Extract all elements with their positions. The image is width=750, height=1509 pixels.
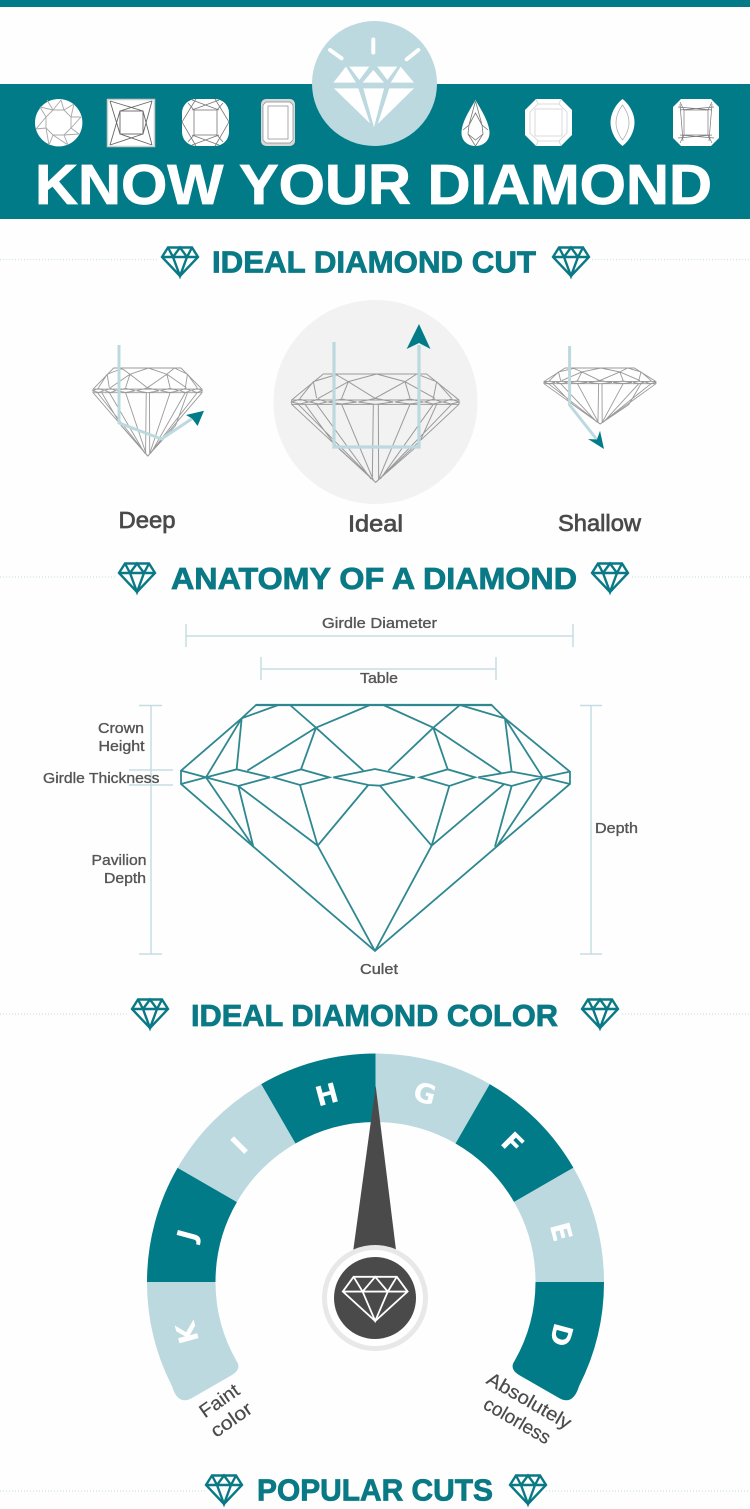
measure: left heights <box>43 706 173 954</box>
segment I: I <box>226 1132 255 1161</box>
segment J <box>147 1168 237 1282</box>
icon: marquise cut <box>610 99 634 146</box>
segment H <box>261 1054 376 1143</box>
heading: anatomy of a diamond: ANATOMY OF A DIAMOND <box>171 561 577 596</box>
measure: table: Table <box>360 670 398 687</box>
caption: absolutely colorless: colorless <box>479 1394 554 1449</box>
segment H: H <box>312 1078 342 1113</box>
panel: color gauge <box>147 1054 604 1449</box>
heading: ideal diamond color: IDEAL DIAMOND COLOR <box>191 998 558 1033</box>
label: culet: Culet <box>360 961 399 978</box>
measure: left heights: Girdle Thickness <box>43 770 160 787</box>
segment I <box>178 1084 296 1202</box>
caption: absolutely colorless <box>479 1369 575 1449</box>
measure: depth: Depth <box>595 820 638 837</box>
measure: left heights: Depth <box>104 870 146 887</box>
icon: round cut <box>35 99 82 146</box>
segment G: G <box>410 1077 439 1112</box>
segment D <box>513 1282 604 1400</box>
gauge hub <box>322 1245 428 1351</box>
segment E: E <box>543 1219 578 1245</box>
icon: asscher cut <box>525 99 572 146</box>
measure: depth <box>580 706 638 954</box>
segment K <box>147 1282 238 1400</box>
icon: cushion cut <box>182 99 229 146</box>
gauge needle <box>353 1086 396 1250</box>
icon: emerald cut <box>261 99 295 146</box>
heading: popular cuts: POPULAR CUTS <box>257 1473 493 1508</box>
segment F: F <box>494 1127 529 1162</box>
icon: princess cut <box>108 100 154 146</box>
icon: radiant cut <box>673 99 719 146</box>
diagram: deep cut <box>93 345 204 456</box>
segment G <box>376 1054 490 1143</box>
icon: pear cut <box>462 100 490 146</box>
diagram: shallow cut <box>544 346 656 449</box>
segment E <box>514 1168 604 1282</box>
heading: ideal diamond cut: IDEAL DIAMOND CUT <box>212 244 536 280</box>
measure: left heights: Height <box>98 738 145 755</box>
label: shallow: Shallow <box>558 510 641 536</box>
measure: girdle diameter: Girdle Diameter <box>322 615 437 632</box>
caption: faint color <box>196 1380 257 1442</box>
caption: absolutely colorless: Absolutely <box>483 1369 575 1434</box>
segment J: J <box>171 1227 204 1246</box>
caption: faint color: color <box>207 1398 257 1442</box>
header banner <box>0 84 750 219</box>
segment D: D <box>542 1320 578 1349</box>
segment F <box>456 1084 573 1202</box>
highlight circle <box>274 300 478 504</box>
panel: ideal cut comparison <box>93 300 656 536</box>
panel: anatomy diagram <box>43 615 638 978</box>
top teal bar <box>0 0 750 7</box>
measure: left heights: Crown <box>98 720 144 737</box>
diagram: large diamond <box>181 705 570 951</box>
caption: faint color: Faint <box>196 1380 244 1423</box>
header emblem: sparkling diamond <box>312 21 437 146</box>
title: KNOW YOUR DIAMOND <box>35 153 712 217</box>
segment K: K <box>170 1317 206 1347</box>
label: deep: Deep <box>118 507 176 533</box>
measure: girdle diameter <box>186 615 573 647</box>
measure: table <box>261 657 496 687</box>
label: ideal: Ideal <box>348 510 403 536</box>
diagram: ideal cut <box>292 324 459 482</box>
measure: left heights: Pavilion <box>92 852 146 869</box>
